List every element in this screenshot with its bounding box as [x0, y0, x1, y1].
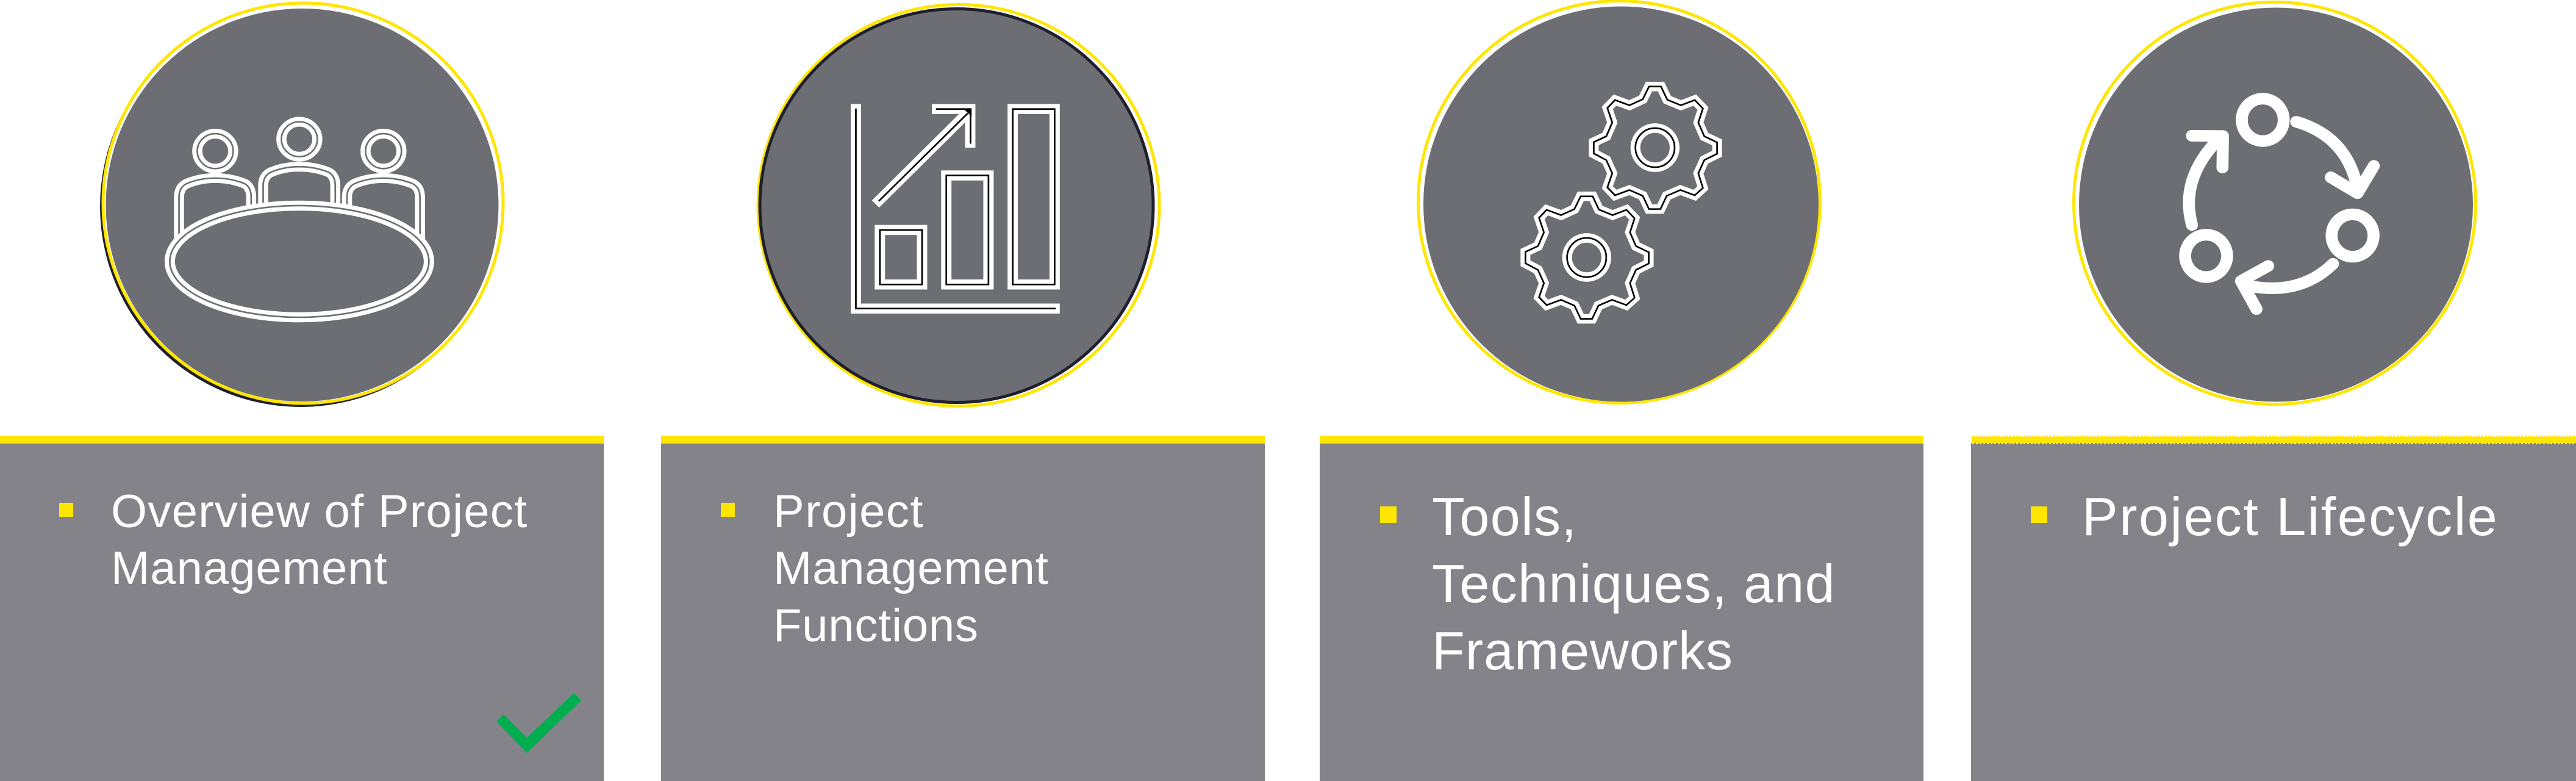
panel 3 yellow rule	[1320, 436, 1923, 444]
icon: green check mark	[496, 693, 581, 753]
panel 4 yellow rule	[1972, 436, 2576, 444]
icon circle: bar chart	[758, 5, 1159, 406]
panel 2 text: Management	[773, 542, 1049, 594]
circle 4 fill	[2079, 7, 2473, 401]
panel 1 text: Management	[111, 542, 388, 594]
circle 2 dark ring and fill	[760, 9, 1153, 403]
panel 1 bullet	[59, 503, 73, 517]
panel: project lifecycle	[1971, 436, 2576, 781]
panel 1 text: Overview of Project	[111, 486, 528, 538]
circle 2 yellow ring	[758, 5, 1159, 406]
icon circle: meeting table	[100, 3, 503, 407]
panel 4 background	[1971, 443, 2576, 781]
panel 3 background	[1320, 444, 1923, 781]
panel 2 text: Functions	[773, 600, 979, 652]
icon circle: lifecycle	[2073, 2, 2476, 404]
panel: overview of project management	[0, 436, 604, 781]
panel: tools, techniques, and frameworks	[1320, 436, 1923, 781]
circle 1 shadow ring	[100, 5, 501, 407]
panel 2 text: Project	[773, 486, 924, 538]
icon: cycle of three nodes and arrows	[2185, 99, 2374, 309]
icon: two interlocking gears	[1525, 87, 1717, 319]
panel 4 text: Project Lifecycle	[2082, 486, 2499, 547]
circle 1 fill	[106, 9, 499, 401]
circle 4 yellow ring	[2073, 2, 2476, 404]
circle 3 fill	[1423, 6, 1819, 401]
icon circle: gears	[1419, 1, 1820, 403]
panel 1 yellow rule	[0, 436, 604, 444]
panel 3 text: Frameworks	[1432, 621, 1733, 681]
panel 2 bullet	[721, 503, 735, 517]
panel 2 yellow rule	[661, 436, 1265, 444]
panel: project management functions	[661, 436, 1265, 781]
panel 2 background	[661, 444, 1265, 781]
circle 1 yellow ring	[103, 3, 503, 403]
panel 4 bullet	[2031, 506, 2047, 523]
panel 3 text: Tools,	[1432, 486, 1577, 547]
panel 3 text: Techniques, and	[1432, 553, 1836, 614]
panel 1 background	[0, 444, 604, 781]
icon: rising bar chart with arrow	[856, 104, 1060, 309]
icon: people around a table	[170, 122, 429, 317]
panel 3 bullet	[1380, 506, 1397, 523]
circle 3 yellow ring	[1419, 1, 1820, 403]
